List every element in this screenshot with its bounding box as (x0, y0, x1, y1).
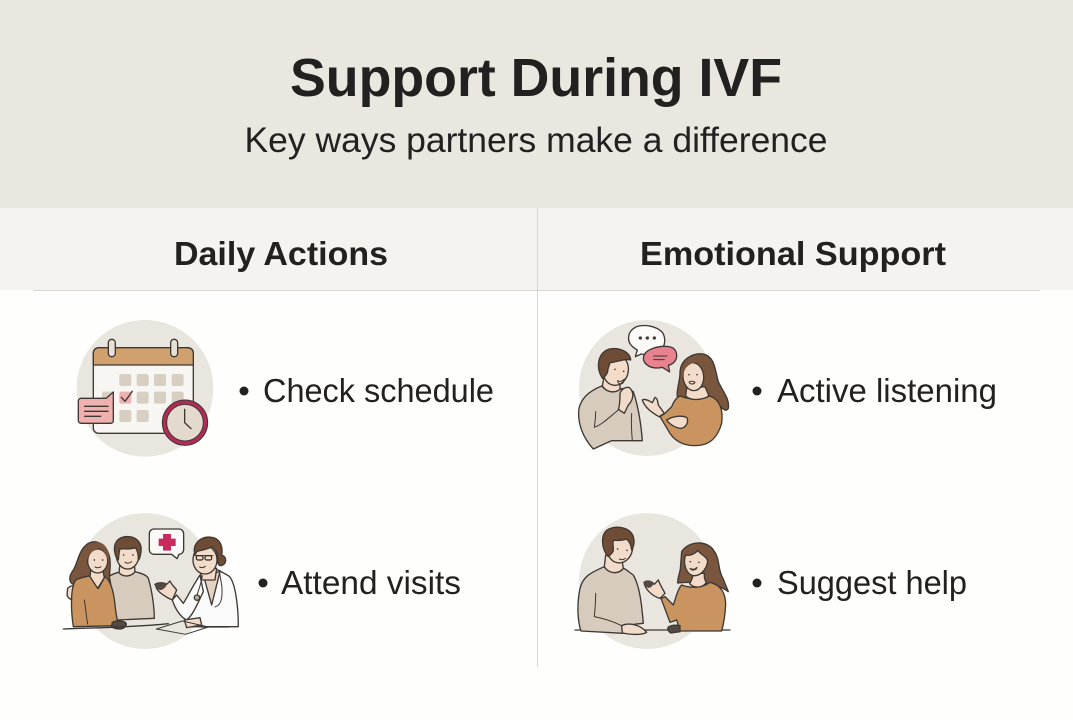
icon: couple talking with speech bubbles (579, 320, 729, 456)
icon: calendar with clock and note (77, 320, 213, 457)
woman (642, 354, 729, 446)
column heading: daily actions: Daily Actions (174, 235, 388, 272)
speech bubble: dots (629, 326, 665, 357)
column header band (0, 208, 1073, 290)
table edge (575, 628, 730, 632)
header band (0, 0, 1073, 208)
bullet: check schedule: Check schedule (263, 372, 494, 409)
man (579, 349, 642, 449)
speech bubble: pink (643, 346, 677, 372)
bullet: attend visits: Attend visits (281, 564, 461, 601)
icon: couple visiting doctor (63, 513, 238, 649)
subtitle: Key ways partners make a difference (244, 121, 828, 160)
title: Support During IVF (290, 48, 782, 108)
woman (67, 542, 126, 629)
speech bubble with medical cross (149, 529, 184, 559)
man (108, 537, 154, 620)
woman (644, 543, 728, 633)
doctor (155, 537, 238, 634)
bullet: suggest help: Suggest help (777, 564, 967, 601)
bullet: active listening: Active listening (777, 372, 997, 409)
icon: couple at table suggesting help (575, 513, 730, 649)
man (578, 527, 647, 634)
table edge (63, 624, 228, 629)
column heading: emotional support: Emotional Support (640, 235, 946, 272)
